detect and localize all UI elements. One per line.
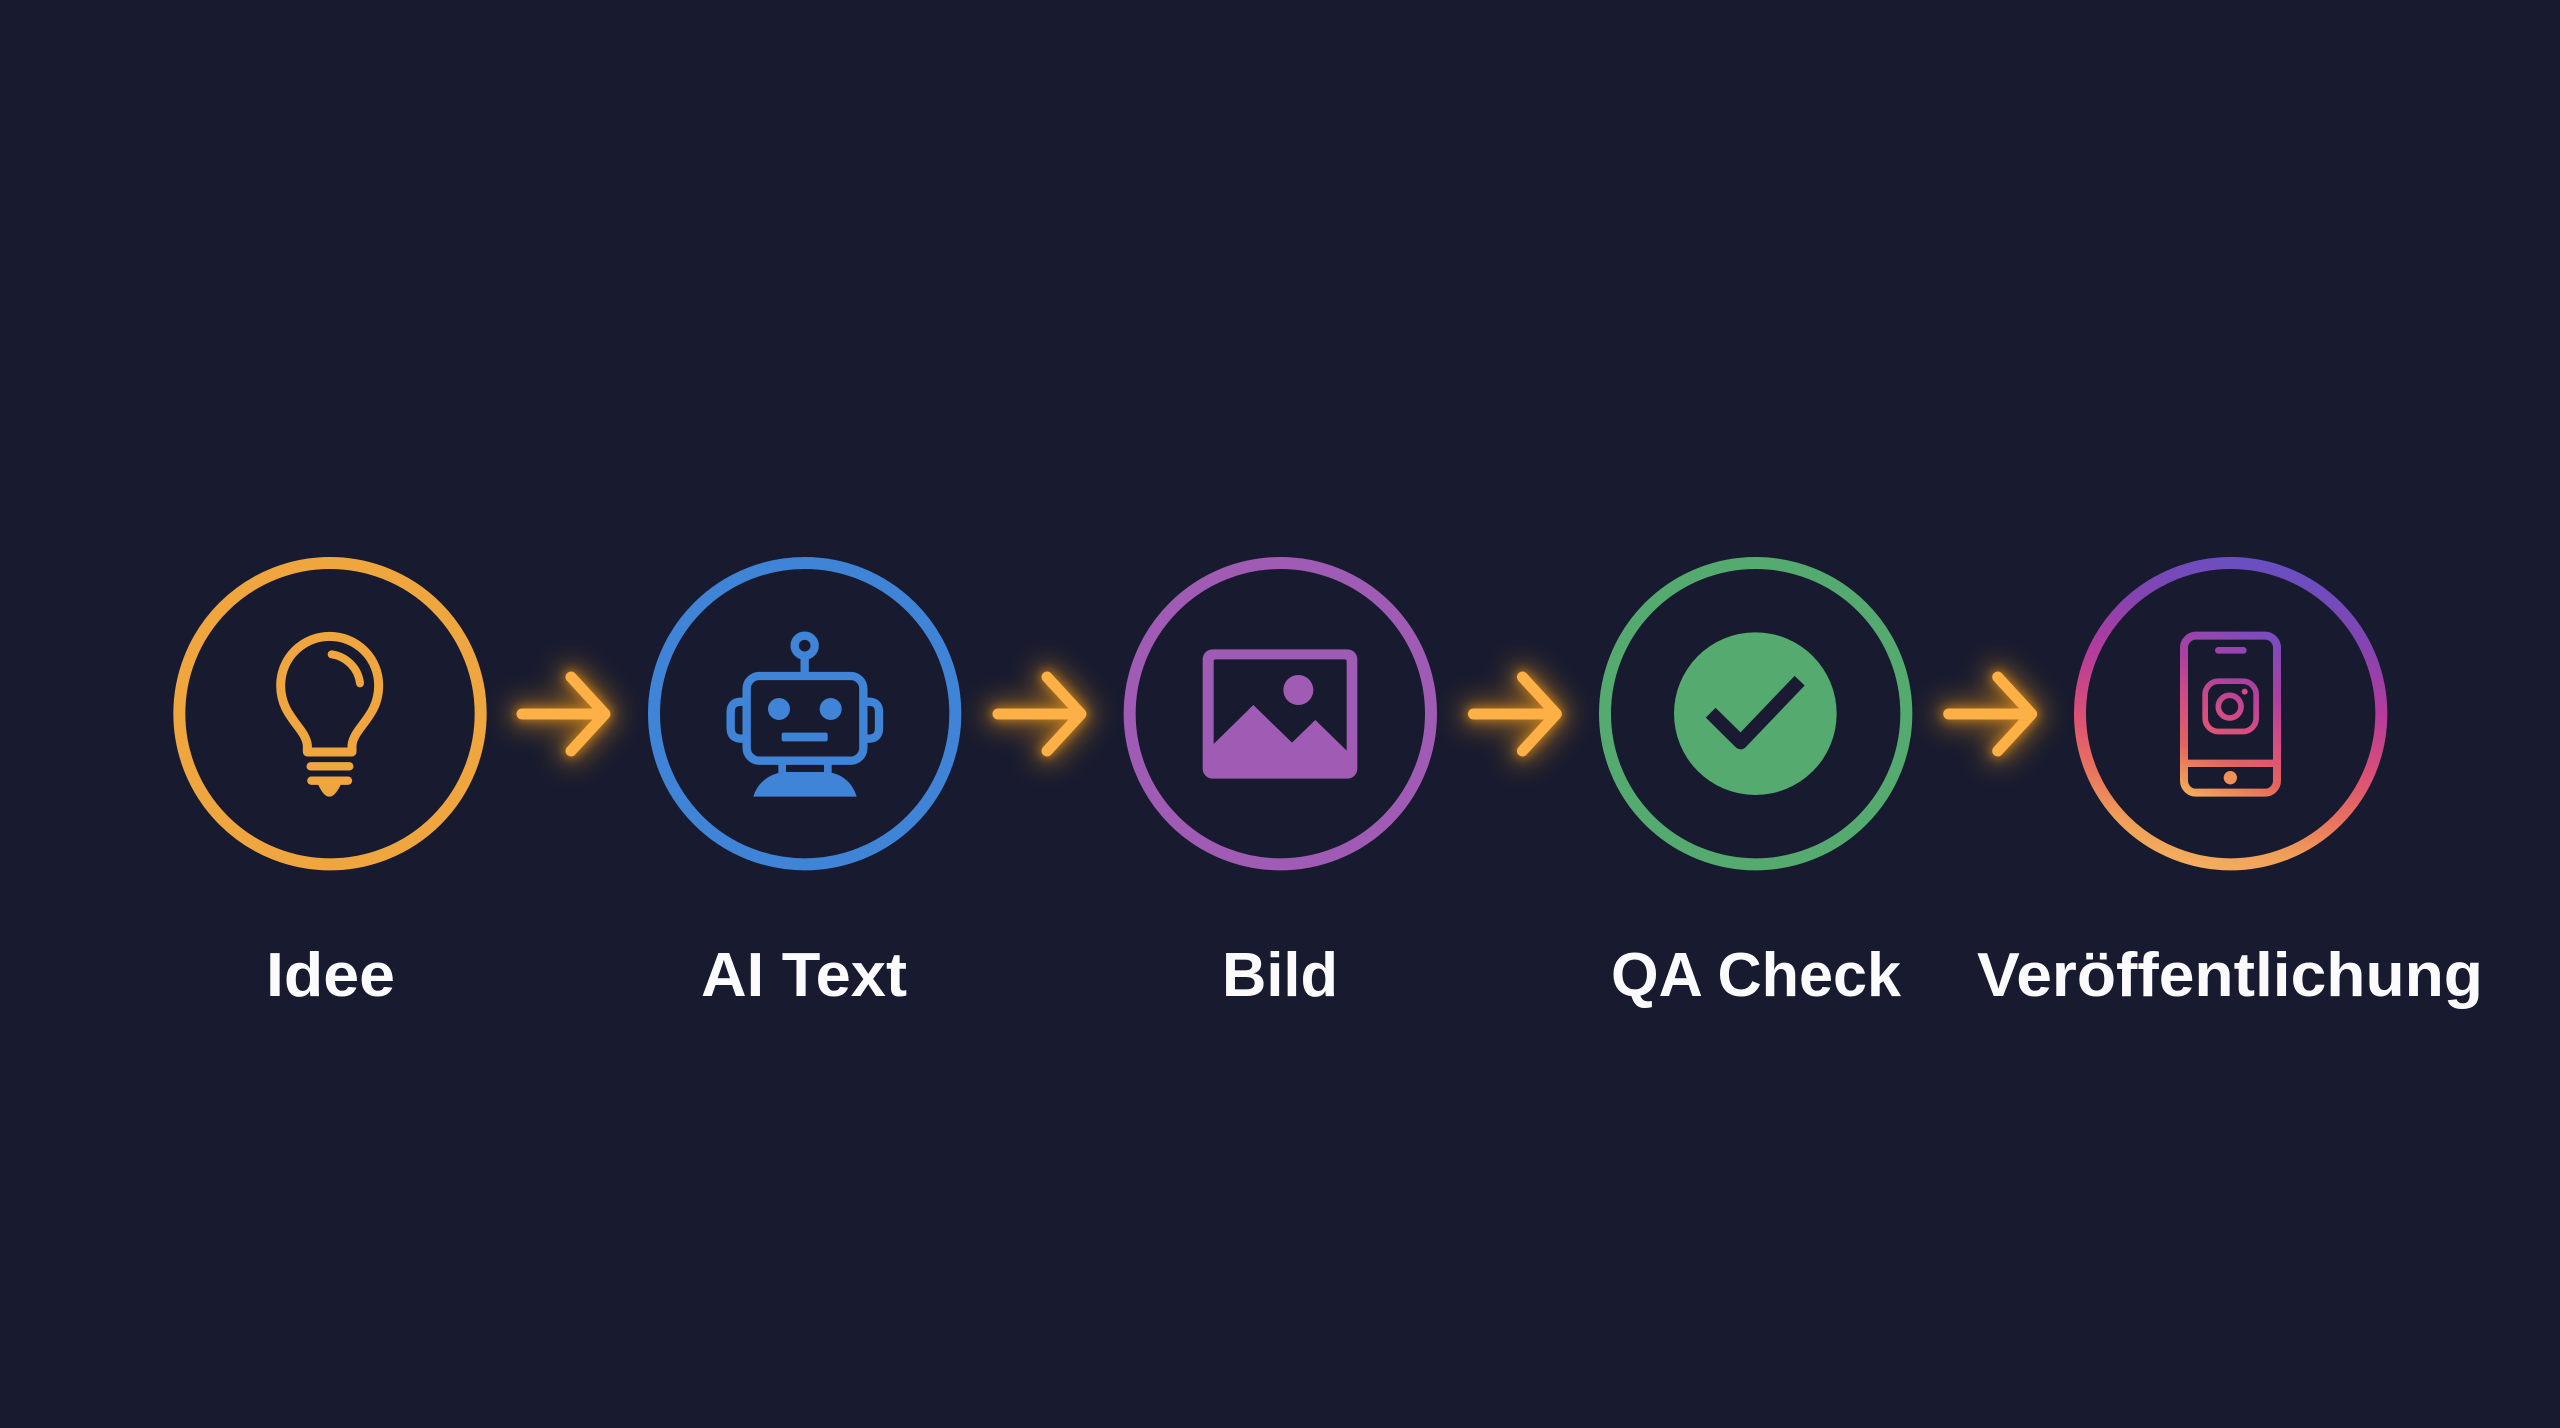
label: Bild: Bild <box>1222 941 1338 1010</box>
label: Idee: Idee <box>266 941 395 1010</box>
step 1: Idee <box>179 563 481 1010</box>
step 5: Veröffentlichung <box>1977 563 2483 1010</box>
label: Veröffentlichung: Veröffentlichung <box>1977 941 2483 1010</box>
arrow 2 <box>998 677 1081 751</box>
step 2: AI Text <box>654 563 955 1010</box>
label: QA Check: QA Check <box>1611 941 1902 1010</box>
step 3: Bild <box>1130 563 1431 1010</box>
step 4: QA Check <box>1605 563 1906 1010</box>
icon ring and robot <box>654 563 955 864</box>
arrow 4 <box>1949 677 2032 751</box>
label: AI Text: AI Text <box>701 941 907 1010</box>
arrow 1 <box>522 677 605 751</box>
icon ring and picture <box>1130 563 1431 864</box>
icon ring and light bulb <box>179 563 481 864</box>
icon ring and phone with Instagram glyph <box>2080 563 2381 864</box>
arrow 3 <box>1473 677 1556 751</box>
icon ring and check badge <box>1605 563 1906 864</box>
